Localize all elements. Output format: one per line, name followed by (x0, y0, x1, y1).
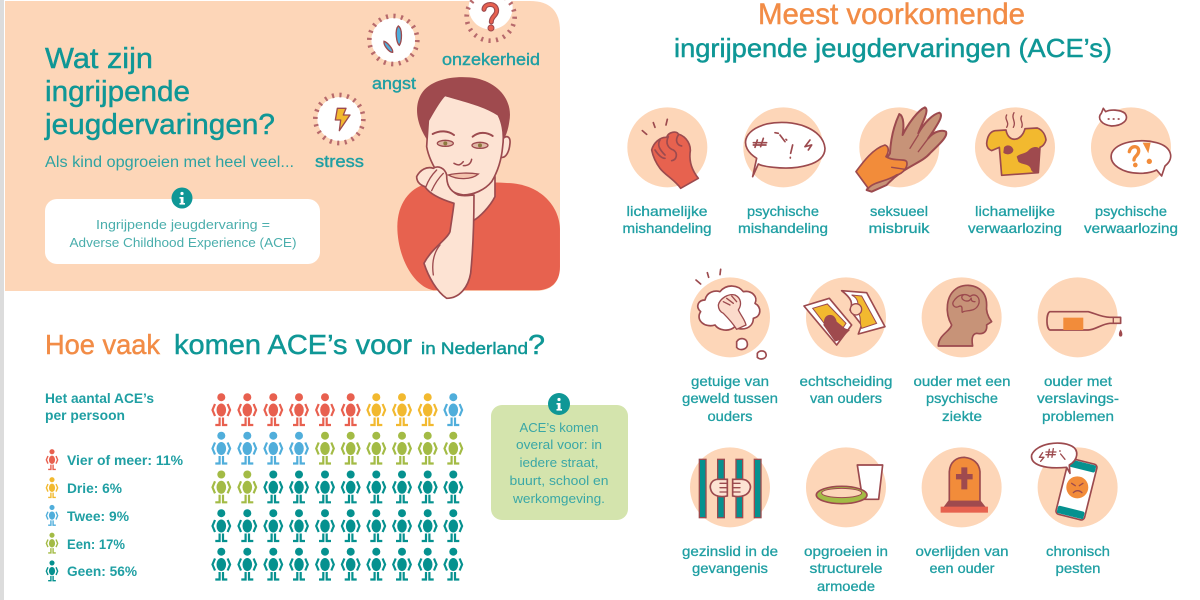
icon: prison bars (690, 447, 770, 527)
item: ouder met verslavingsproblemen: problemen (1042, 408, 1114, 424)
item: getuige van geweld tussen ouders (682, 269, 778, 424)
item: overlijden van een ouder: een ouder (930, 560, 995, 576)
definition box (45, 199, 320, 264)
icon: uncertainty burst (467, 0, 515, 41)
item: chronisch pesten: pesten (1056, 560, 1100, 576)
label: psychische (1095, 203, 1167, 219)
heading: how often do ACEs occur: in Nederland (421, 339, 528, 358)
legend heading (45, 391, 154, 423)
pictogram chart: 100 percent in 50 figures (212, 393, 462, 580)
legend item: twee: Twee: 9% (67, 509, 129, 524)
legend item: een: Een: 17% (67, 537, 125, 552)
subtitle: Als kind opgroeien met heel veel... (45, 154, 294, 171)
item: ouder met verslavingsproblemen (1037, 277, 1122, 424)
item: lichamelijke mishandeling (622, 107, 712, 236)
heading: how often do ACEs occur: ? (528, 329, 545, 360)
item: opgroeien in structurele armoede (804, 447, 888, 594)
icon: two speech bubbles (1091, 107, 1171, 187)
item: chronisch pesten (1032, 443, 1118, 576)
heading: Wat zijn ingrijpende jeugdervaringen?: Wat zijn (45, 43, 153, 75)
legend heading: Het aantal ACE’s (45, 391, 154, 406)
label: getuige van (691, 373, 769, 389)
callout: ACEs occur everywhere: buurt, school en (510, 474, 609, 488)
torso (397, 182, 560, 290)
item: lichamelijke mishandeling: mishandeling (622, 220, 712, 236)
heading: how often do ACEs occur: komen ACE’s voor (174, 329, 412, 360)
label: lichamelijke (975, 203, 1055, 219)
icon: phone with angry emoji and bubble (1032, 443, 1118, 527)
callout: ACEs occur everywhere: overal voor: in (516, 438, 602, 452)
item: lichamelijke verwaarlozing (968, 107, 1062, 236)
item: echtscheiding van ouders: van ouders (810, 390, 882, 406)
arm and hand (417, 167, 474, 298)
label: overlijden van (916, 543, 1008, 559)
item: psychische verwaarlozing: verwaarlozing (1084, 220, 1178, 236)
item: getuige van geweld tussen ouders: geweld tussen (682, 390, 778, 406)
icon: plate and glass (806, 447, 886, 527)
label: ouder met (1044, 373, 1112, 389)
heading: most common ACEs (674, 0, 1112, 63)
icon: bottle (1038, 277, 1122, 357)
icon: thought cloud with fist (690, 269, 770, 359)
legend item: vier of meer: Vier of meer: 11% (67, 453, 183, 468)
icon: anxiety burst (369, 16, 417, 64)
item: psychische verwaarlozing (1084, 107, 1178, 236)
item: getuige van geweld tussen ouders: ouders (708, 408, 752, 424)
item: ouder met verslavingsproblemen: verslavings- (1037, 390, 1119, 406)
item: echtscheiding van ouders (800, 277, 892, 406)
heading: Wat zijn ingrijpende jeugdervaringen?: ingrijpende (45, 76, 190, 108)
item: ouder met een psychische ziekte: psychische (926, 390, 998, 406)
label: lichamelijke (626, 203, 708, 219)
ear (501, 137, 510, 157)
label: echtscheiding (800, 373, 892, 389)
item: seksueel misbruik: misbruik (868, 220, 931, 236)
item: psychische mishandeling (738, 107, 828, 236)
heading: how often do ACEs occur (45, 329, 545, 360)
icon: info (548, 393, 570, 415)
icon: dirty shirt (975, 107, 1055, 187)
icon: stress burst (315, 95, 363, 143)
legend (46, 449, 183, 581)
callout: ACEs occur everywhere: iedere straat, (520, 456, 598, 470)
definition box: Ingrijpende jeugdervaring = (96, 217, 270, 232)
item: gezinslid in de gevangenis: gevangenis (692, 560, 768, 576)
item: ouder met een psychische ziekte: ziekte (942, 408, 982, 424)
legend heading: per persoon (45, 408, 125, 423)
icon: info (172, 188, 192, 208)
icon: head with tangled brain (922, 277, 1002, 357)
item: opgroeien in structurele armoede: armoede (817, 578, 875, 594)
label: stress: stress (315, 152, 364, 171)
heading: how often do ACEs occur: Hoe vaak (45, 329, 161, 360)
label: seksueel (870, 203, 928, 219)
icon: grabbing hands (856, 107, 946, 192)
icon: fist (627, 107, 707, 188)
label: gezinslid in de (682, 543, 778, 559)
label: ouder met een (914, 373, 1010, 389)
item: overlijden van een ouder (916, 447, 1008, 576)
callout: ACEs occur everywhere: ACE’s komen (520, 421, 599, 435)
legend item: drie: Drie: 6% (67, 481, 122, 496)
callout: ACEs occur everywhere: werkomgeving. (512, 492, 605, 506)
hair (417, 77, 510, 142)
label: onzekerheid: onzekerheid (442, 50, 540, 69)
item: ouder met een psychische ziekte (914, 277, 1010, 424)
label: chronisch (1046, 543, 1110, 559)
facial features (433, 131, 493, 137)
face (427, 95, 503, 195)
icon: torn photo (804, 277, 886, 357)
item: lichamelijke verwaarlozing: verwaarlozing (968, 220, 1062, 236)
item: opgroeien in structurele armoede: structurele (810, 560, 883, 576)
illustration: thoughtful person (397, 77, 560, 298)
item: psychische mishandeling: mishandeling (738, 220, 828, 236)
heading: Wat zijn ingrijpende jeugdervaringen?: jeugdervaringen? (44, 109, 275, 141)
label: opgroeien in (804, 543, 888, 559)
icon: speech bubble with cursing (743, 107, 825, 187)
legend item: geen: Geen: 56% (67, 564, 137, 579)
callout: ACEs occur everywhere (491, 393, 628, 520)
heading: most common ACEs: ingrijpende jeugdervaringen (ACE’s) (674, 33, 1112, 63)
icon: tombstone (922, 447, 1002, 527)
label: angst: angst (372, 74, 416, 93)
panel: what are ACEs (5, 0, 560, 298)
definition box: Adverse Childhood Experience (ACE) (70, 235, 296, 250)
item: gezinslid in de gevangenis (682, 447, 778, 576)
neck (447, 177, 495, 221)
item: seksueel misbruik (856, 107, 946, 236)
label: psychische (747, 203, 819, 219)
heading: Wat zijn ingrijpende jeugdervaringen? (44, 43, 275, 141)
